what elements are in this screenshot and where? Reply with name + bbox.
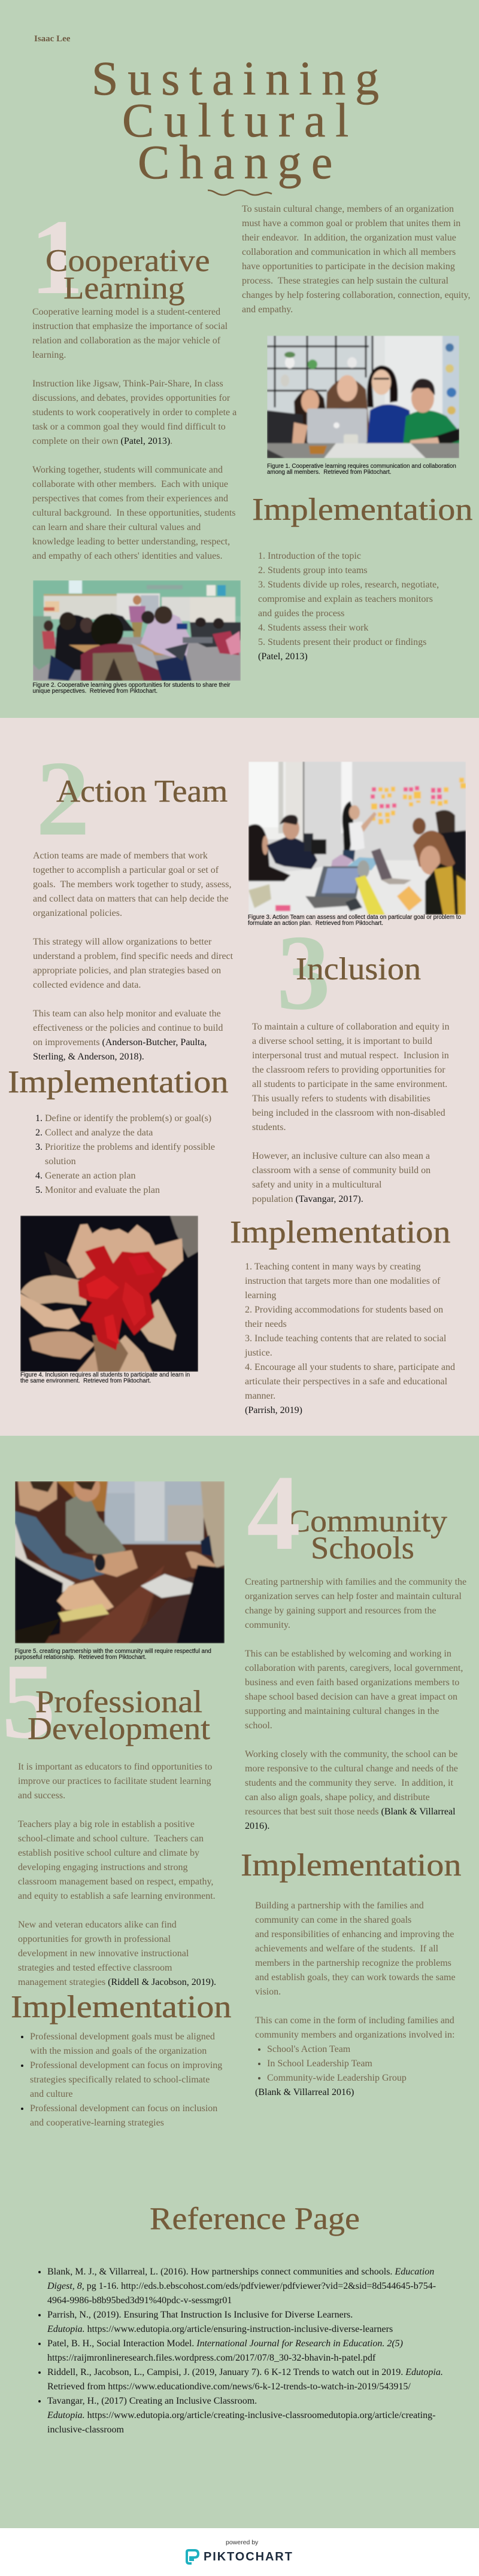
text: cooperative learning description: task or a common goal they would find difficult to [32,422,226,432]
text: action team description: and collect data on matters that can help decide the [33,894,229,904]
text: inclusion description: However, an inclusive culture can also mean a [252,1151,430,1161]
title: Cultural [122,95,359,147]
heading: implementation: Implementation [241,1847,461,1882]
intro text: process. These strategies can help sustain the cultural [242,276,448,286]
text: professional development description: and success. [18,1791,65,1801]
text: action team description: appropriate policies, and plan strategies based on [33,966,221,976]
text: action team description: This team can also help monitor and evaluate the [33,1009,221,1019]
caption: figure 3 [248,914,461,927]
list: references: Retrieved from https://www.educationdive.com/news/6-k-12-trends-to-watch-in-2019/543915/ [47,2382,411,2392]
text: inclusion description: This usually refers to students with disabilities [252,1094,431,1104]
text: action team description: goals. The members work together to study, assess, [33,879,231,890]
text: action team description: effectiveness or the policies and continue to build [33,1023,223,1033]
intro text: have opportunities to participate in the decision making [242,261,455,272]
list: references: Tavangar, H., (2017) Creating an Inclusive Classroom. [47,2396,257,2406]
intro text: their endeavor. In addition, the organization must value [242,233,456,243]
number 1: 1 [30,197,84,316]
list: inclusion implementation steps: 1. Teaching content in many ways by creating [245,1262,421,1272]
list: references: Riddell, R., Jacobson, L., Campisi, J. (2019, January 7). 6 K-12 Trends to watch out in 2019. Edutopia. [47,2367,443,2377]
text: action team description: Sterling, & Anderson, 2018). [33,1052,144,1062]
text and list: community schools implementation: community members and organizations involved in: [255,2030,454,2040]
text: cooperative learning description: perspectives that comes from their experiences and [32,494,228,504]
text: cooperative learning description: students to work cooperatively in order to complete a [32,407,237,418]
text: inclusion description: a diverse school setting, it is important to build [252,1036,432,1046]
icon: piktochart logo mark [186,2549,199,2565]
list: inclusion implementation steps: 3. Include teaching contents that are related to social [245,1333,446,1344]
list: implementation steps: (Patel, 2013) [258,651,308,662]
text: professional development description: school-climate and school culture. Teachers can [18,1834,204,1844]
list: action team implementation steps: Generate an action plan [45,1171,135,1181]
photo: figure 3 team meeting with sticky notes [248,762,466,915]
list: references: Patel, B. H., Social Interaction Model. International Journal for Research in Education. 2(5) [47,2339,403,2349]
text: community schools description: shape school based decision can have a great impact on [245,1692,457,1702]
text: action team description [33,851,233,1062]
list: implementation steps: 2. Students group into teams [258,565,368,576]
list: inclusion implementation steps: their needs [245,1319,287,1329]
caption: figure 4 [20,1372,190,1384]
heading: community schools [288,1504,447,1566]
list: references: Edutopia. https://www.edutopia.org/article/ensuring-instruction-inclusive-diverse-learners [47,2324,393,2334]
number 2: 2 [36,739,90,858]
caption: figure 1 [267,463,456,476]
caption: figure 2: unique perspectives. Retrieved from Piktochart. [32,688,157,695]
text and list: community schools implementation: members in the partnership recognize the problems [255,1958,451,1968]
text: professional development description: and equity to establish a safe learning environment. [18,1891,216,1901]
text: inclusion description: students. [252,1122,286,1132]
text and list: community schools implementation: (Blank & Villarreal 2016) [255,2087,354,2097]
heading: cooperative learning [46,243,210,306]
text: inclusion description: safety and unity in a multicultural [252,1180,381,1190]
photo: figure 2 classroom with teacher [33,580,241,681]
caption: figure 1: among all members. Retrieved from Piktochart. [267,469,391,476]
text: community schools description: more responsive to the cultural change and needs of the [245,1764,458,1774]
list: inclusion implementation steps: learning [245,1290,276,1301]
text: cooperative learning description: relation and collaboration as the major vehicle of [32,336,220,346]
caption: figure 2 [32,682,231,695]
list: implementation steps: 1. Introduction of the topic [258,550,361,561]
list: inclusion implementation steps: manner. [245,1391,275,1401]
text: community schools description: Working closely with the community, the school can be [245,1749,457,1759]
text: action team description: Action teams are made of members that work [33,851,208,861]
heading: professional development: Development [28,1712,210,1746]
text and list: community schools implementation: School's Action Team [267,2044,350,2054]
text: cooperative learning description: Instruction like Jigsaw, Think-Pair-Share, In class [32,379,223,389]
piktochart wordmark: PIKTOCHART [204,2550,293,2563]
text: community schools description: business and even faith based organizations members to [245,1677,459,1688]
panel: section one cooperative learning [0,0,479,718]
list: professional development implementation: with the mission and goals of the organization [30,2046,207,2056]
text: cooperative learning description: instruction that emphasize the importance of social [32,321,228,331]
intro text: and empathy. [242,305,293,315]
text: professional development description: establish positive school culture and climate by [18,1848,199,1858]
list: inclusion implementation steps: 2. Providing accommodations for students based on [245,1305,443,1315]
intro text: must have a common goal or problem that unites them in [242,218,460,229]
text: inclusion description: all students to participate in the same environment. [252,1079,447,1089]
text: action team description: This strategy will allow organizations to better [33,937,211,947]
list: professional development implementation: Professional development can focus on inclusion [30,2103,217,2114]
heading: implementation: Implementation [8,1065,228,1100]
text: community schools description: change by gaining support and resources from the [245,1606,436,1616]
heading: cooperative learning: Learning [63,271,185,306]
text and list: community schools implementation: Building a partnership with the families and [255,1901,424,1911]
text: professional development description: development in new innovative instructional [18,1948,189,1959]
caption: figure 4: the same environment. Retrieved from Piktochart. [20,1378,151,1384]
text: community schools description: can also align goals, shape policy, and distribute [245,1792,430,1802]
text: cooperative learning description: knowledge leading to better understanding, respect, [32,537,230,547]
list: references [38,2267,443,2435]
text: professional development description: improve our practices to facilitate student learning [18,1776,211,1786]
text: professional development description: opportunities for growth in professional [18,1934,171,1944]
list: inclusion implementation steps: articulate their perspectives in a safe and educational [245,1377,447,1387]
heading: implementation: Implementation [230,1214,450,1249]
list: references: Edutopia. https://www.edutopia.org/article/creating-inclusive-classroomedutopia.org/article/creating- [47,2410,435,2420]
text: professional development description: strategies and tested effective classroom [18,1963,172,1973]
photo: figure 5 people at a wooden table [15,1481,225,1643]
photo: figure 4 hands painted red forming heart [20,1216,198,1372]
text: cooperative learning description: discussions, and debates, provides opportunities for [32,393,230,403]
list: action team implementation steps: Monitor and evaluate the plan [45,1185,160,1195]
caption: figure 3: Figure 3. Action Team can assess and collect data on particular goal or problem to [248,914,461,921]
text and list: community schools implementation: and establish goals, they can work towards the same [255,1972,456,1983]
text and list: community schools implementation: and responsibilities of enhancing and improving the [255,1929,454,1939]
list: inclusion implementation steps: instruction that targets more than one modalities of [245,1276,440,1286]
intro text: To sustain cultural change, members of an organization [242,204,454,214]
caption: figure 5: purposeful relationship. Retrieved from Piktochart. [14,1654,146,1661]
text: action team description: on improvements (Anderson-Butcher, Paulta, [33,1037,207,1048]
list: implementation steps: 5. Students present their product or findings [258,637,426,647]
text: action team description: collected evidence and data. [33,980,141,990]
text: cooperative learning description: Cooperative learning model is a student-centered [32,307,220,317]
text: community schools description: supporting and maintaining cultural changes in the [245,1706,439,1716]
text: action team description: understand a problem, find specific needs and direct [33,951,233,961]
intro text: collaboration and communication in which all members [242,247,456,257]
text: professional development description: It is important as educators to find opportunities to [18,1762,212,1772]
caption: figure 5: Figure 5. creating partnership with the community will require respectful and [14,1648,211,1655]
text: cooperative learning description: collaborate with other members. Each with unique [32,479,228,489]
text: inclusion description [252,1022,449,1204]
list: professional development implementation: and cooperative-learning strategies [30,2118,164,2128]
text: professional development description: Teachers play a big role in establish a positive [18,1819,195,1829]
list: action team implementation steps: Prioritize the problems and identify possible [45,1142,215,1152]
list: professional development implementation: Professional development can focus on improving [30,2060,222,2070]
text: cooperative learning description: learning. [32,350,66,360]
title: Sustaining [92,53,389,105]
list: professional development implementation [21,2032,222,2128]
list: implementation steps: 3. Students divide up roles, research, negotiate, [258,579,439,590]
text: inclusion description: interpersonal trust and mutual respect. Inclusion in [252,1051,449,1061]
list: inclusion implementation steps: justice. [245,1348,272,1358]
list: implementation steps: 4. Students assess their work [258,622,368,633]
caption: figure 4: Figure 4. Inclusion requires all students to participate and learn in [20,1372,190,1378]
heading: inclusion: Inclusion [296,951,421,986]
heading: implementation: Implementation [252,492,472,526]
text: action team description: organizational policies. [33,908,122,918]
list: action team implementation steps [35,1113,215,1195]
text: professional development description: developing engaging instructions and strong [18,1862,188,1872]
text: cooperative learning description: cultural background. In these opportunities, students [32,508,235,518]
text: cooperative learning description [32,307,237,561]
list: inclusion implementation steps: 4. Encourage all your students to share, participate and [245,1362,455,1372]
text: professional development description: classroom management based on respect, empathy, [18,1877,213,1887]
text: professional development description: New and veteran educators alike can find [18,1920,177,1930]
text: community schools description: resources that best suit those needs (Blank & Villarreal [245,1807,456,1817]
text: inclusion description: being included in the classroom with non-disabled [252,1108,445,1118]
list: professional development implementation: and culture [30,2089,73,2099]
text: action team description: together to accomplish a particular goal or set of [33,865,219,875]
list: action team implementation steps: Collect and analyze the data [45,1128,153,1138]
panel: section three community schools and professional development [0,1436,479,2528]
text: cooperative learning description: can learn and share their cultural values and [32,522,201,532]
list: references: inclusive-classroom [47,2425,124,2435]
caption: figure 3: formulate an action plan. Retrieved from Piktochart. [248,920,383,927]
text and list: community schools implementation: achievements and welfare of the students. If all [255,1944,438,1954]
text: community schools description: community. [245,1620,290,1630]
heading: action team: Action Team [56,774,228,809]
text: community schools description: collaboration with parents, caregivers, local government, [245,1663,463,1673]
list: references: Digest, 8, pg 1-16. http://eds.b.ebscohost.com/eds/pdfviewer/pdfviewer?vid=2&sid=8d544645-b754- [47,2281,436,2291]
heading: reference page: Reference Page [150,2202,360,2236]
list: action team implementation steps: Define or identify the problem(s) or goal(s) [45,1113,211,1123]
text: community schools description [245,1577,466,1831]
powered by label: powered by [226,2539,258,2546]
list: references: Parrish, N., (2019). Ensuring That Instruction Is Inclusive for Diverse Learners. [47,2310,353,2320]
list: references: Blank, M. J., & Villarreal, L. (2016). How partnerships connect communities and schools. Education [47,2267,434,2277]
title [92,53,389,189]
list: professional development implementation: Professional development goals must be aligned [30,2032,215,2042]
photo: figure 1 team around a laptop [267,336,459,458]
text: inclusion description: classroom with a sense of community build on [252,1165,431,1176]
caption: figure 5 [14,1648,211,1661]
text: community schools description: school. [245,1721,272,1731]
text and list: community schools implementation: In School Leadership Team [267,2059,372,2069]
heading: cooperative learning: Cooperative [46,243,210,278]
decorative squiggle under title [208,189,272,196]
panel: section two action team and inclusion [0,718,479,1436]
list: references: 4964-9986-b8b95bed3d91%40pdc-v-sessmgr01 [47,2295,232,2306]
text: community schools description: students and the community they serve. In addition, it [245,1778,453,1788]
text and list: community schools implementation: community can come in the shared goals [255,1915,411,1925]
list: implementation steps: compromise and explain as teachers monitors [258,593,433,604]
caption: figure 2: Figure 2. Cooperative learning gives opportunities for students to share their [32,682,231,689]
list: action team implementation steps: solution [45,1156,76,1167]
number 3: 3 [277,913,331,1032]
heading: community schools: Schools [311,1531,414,1566]
list: inclusion implementation steps [244,1262,455,1415]
list: references: https://raijmronlineresearch.files.wordpress.com/2017/07/8_30-32-bhavin-h-patel.pdf [47,2353,375,2363]
number 4: 4 [247,1453,301,1572]
author name: Isaac Lee [34,34,70,44]
heading: community schools: Community [288,1504,447,1539]
text: cooperative learning description: complete on their own (Patel, 2013). [32,436,172,446]
list: professional development implementation: strategies specifically related to school-climate [30,2075,210,2085]
text and list: community schools implementation: Community-wide Leadership Group [267,2073,407,2083]
list: implementation steps [258,550,439,662]
text: community schools description: This can be established by welcoming and working in [245,1649,451,1659]
panel: footer [0,2528,479,2576]
heading: professional development: Professional [35,1685,202,1719]
intro text: changes by help fostering collaboration, connection, equity, [242,290,471,300]
list: implementation steps: and guides the process [258,608,344,619]
text and list: community schools implementation: This can come in the form of including families and [255,2015,454,2026]
text: professional development description: management strategies (Riddell & Jacobson, 2019). [18,1977,216,1987]
heading: professional development [28,1685,210,1746]
text: cooperative learning description: and empathy of each others' identities and values. [32,551,222,561]
list: inclusion implementation steps: (Parrish, 2019) [245,1405,302,1415]
intro text [242,204,471,315]
text: professional development description [18,1762,216,1987]
text and list: community schools implementation [255,1901,456,2097]
text and list: community schools implementation: vision. [255,1987,281,1997]
text: inclusion description: To maintain a culture of collaboration and equity in [252,1022,449,1032]
caption: figure 1: Figure 1. Cooperative learning requires communication and collaboration [267,463,456,470]
text: inclusion description: population (Tavangar, 2017). [252,1194,363,1204]
title: Change [138,136,342,189]
text: cooperative learning description: Working together, students will communicate and [32,465,223,475]
text: community schools description: organization serves can help foster and maintain cultural [245,1591,462,1601]
text: inclusion description: the classroom refers to providing opportunities for [252,1065,445,1075]
text: community schools description: 2016). [245,1821,269,1831]
text: community schools description: Creating partnership with families and the community the [245,1577,466,1587]
number 5: 5 [2,1642,56,1761]
heading: implementation: Implementation [11,1990,231,2024]
